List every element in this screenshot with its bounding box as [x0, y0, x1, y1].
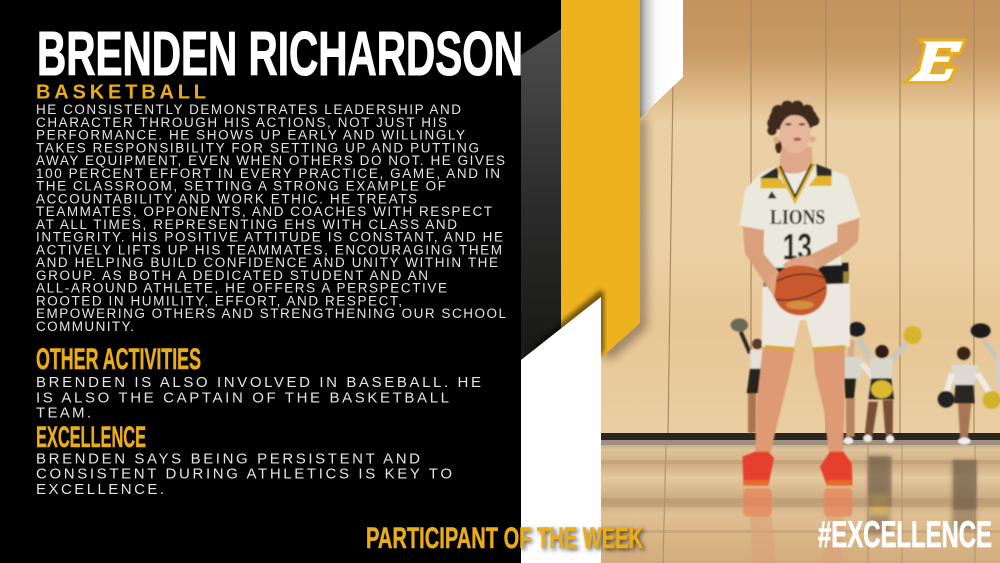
text block: excellence	[36, 450, 452, 498]
photo: basketball player in gym	[600, 0, 1000, 563]
icon: school E logo	[905, 40, 965, 83]
text block: main biography: TEAMMATES, OPPONENTS, AND COACHES WITH RESPECT	[36, 204, 492, 219]
waistband	[763, 263, 849, 287]
text block: main biography: CHARACTER THROUGH HIS ACTIONS, NOT JUST HIS	[36, 115, 447, 130]
jersey lettering: 13	[783, 226, 812, 267]
text block: main biography: EMPOWERING OTHERS AND STRENGTHENING OUR SCHOOL	[36, 306, 506, 321]
jersey lettering: LIONS	[770, 207, 825, 229]
subtitle: sport: BASKETBALL	[36, 82, 206, 104]
text block: main biography: AWAY EQUIPMENT, EVEN WHEN OTHERS DO NOT. HE GIVES	[36, 153, 505, 168]
text block: main biography: COMMUNITY.	[36, 319, 134, 334]
shoes	[743, 452, 853, 486]
text block: other activities: BRENDEN IS ALSO INVOLVED IN BASEBALL. HE	[36, 374, 481, 391]
text block: main biography	[36, 102, 506, 334]
text block: main biography: PERFORMANCE. HE SHOWS UP EARLY AND WILLINGLY	[36, 128, 465, 142]
gym floor	[600, 433, 1000, 563]
head	[767, 101, 819, 153]
ribbon: white wedge	[521, 297, 601, 563]
text block: main biography: TAKES RESPONSIBILITY FOR SETTING UP AND PUTTING	[36, 140, 479, 155]
text block: excellence: CONSISTENT DURING ATHLETICS IS KEY TO	[36, 466, 452, 482]
ribbon: gold stripe	[561, 0, 640, 358]
cheerleader left	[731, 318, 764, 433]
gym wall	[600, 0, 1000, 436]
text block: other activities: IS ALSO THE CAPTAIN OF THE BASKETBALL	[36, 390, 449, 406]
text block: main biography: THE CLASSROOM, SETTING A STRONG EXAMPLE OF	[36, 179, 446, 194]
shorts	[762, 280, 850, 350]
hands	[768, 256, 819, 298]
cheerleader back centre	[842, 322, 877, 444]
jersey	[739, 165, 861, 268]
cheerleader right	[938, 347, 1000, 445]
text block: main biography: HE CONSISTENTLY DEMONSTRATES LEADERSHIP AND	[36, 102, 461, 117]
text block: main biography: 100 PERCENT EFFORT IN EVERY PRACTICE, GAME, AND IN	[36, 166, 500, 181]
player	[739, 101, 861, 563]
text block: main biography: ACTIVELY LIFTS UP HIS TEAMMATES, ENCOURAGING THEM	[36, 242, 502, 257]
text block: other activities	[36, 374, 481, 422]
jersey trim	[761, 163, 832, 199]
title: BRENDEN RICHARDSON	[37, 20, 523, 89]
basketball	[773, 263, 827, 315]
ribbon: dark grey stripe	[521, 29, 561, 340]
arms	[743, 218, 859, 293]
text block: main biography: INTEGRITY. HIS POSITIVE ATTITUDE IS CONSTANT, AND HE	[36, 230, 503, 245]
shoe reflections	[743, 488, 852, 517]
text block: other activities: TEAM.	[36, 404, 91, 422]
ribbon: white top stripe	[640, 0, 683, 118]
heading: excellence: EXCELLENCE	[36, 421, 146, 454]
ribbon shadow: gold stripe shadow	[600, 118, 646, 360]
cheerleader centre	[858, 326, 922, 443]
cheerleader far right	[971, 323, 1000, 390]
text block: main biography: AND HELPING BUILD CONFIDENCE AND UNITY WITHIN THE	[36, 255, 498, 270]
label: participant of the week: PARTICIPANT OF THE WEEK	[366, 522, 643, 555]
text block: excellence: EXCELLENCE.	[36, 481, 164, 498]
jersey lettering	[770, 207, 825, 267]
text block: main biography: ACCOUNTABILITY AND WORK ETHIC. HE TREATS	[36, 191, 417, 206]
heading: other activities: OTHER ACTIVITIES	[36, 343, 201, 376]
floor reflections	[868, 457, 977, 510]
undershirt and neck	[779, 147, 813, 198]
text block: main biography: ALL-AROUND ATHLETE, HE OFFERS A PERSPECTIVE	[36, 281, 447, 296]
text block: excellence: BRENDEN SAYS BEING PERSISTENT AND	[36, 450, 420, 468]
text block: main biography: GROUP. AS BOTH A DEDICATED STUDENT AND AN	[36, 268, 428, 283]
text block: main biography: AT ALL TIMES, REPRESENTING EHS WITH CLASS AND	[36, 217, 457, 232]
cheerleaders	[731, 318, 1000, 510]
legs	[755, 347, 845, 455]
text block: main biography: ROOTED IN HUMILITY, EFFORT, AND RESPECT,	[36, 293, 402, 308]
